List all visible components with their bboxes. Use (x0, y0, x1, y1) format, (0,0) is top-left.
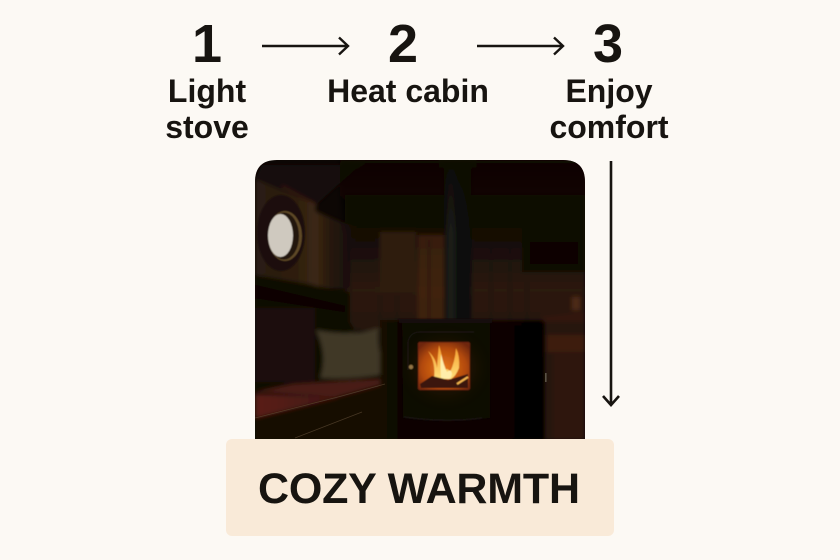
top shadow over wall (340, 160, 585, 235)
step 1 label: Light (168, 73, 246, 109)
wood wall (345, 195, 585, 330)
ceiling (255, 165, 360, 205)
porthole frame (257, 195, 305, 271)
bench seat front cushion (255, 394, 337, 418)
floor and stove surround (380, 320, 545, 440)
shelf ledge (255, 285, 345, 312)
step 3 number: 3 (593, 14, 623, 74)
curtain (314, 211, 351, 289)
flames (428, 345, 459, 379)
step 1 label: stove (165, 109, 249, 145)
cabinet door (582, 438, 583, 439)
right cabinet (545, 318, 585, 440)
pillow (316, 328, 386, 378)
stove handle (409, 365, 413, 369)
step 1 number: 1 (192, 14, 222, 74)
wall picture (520, 228, 585, 272)
wall planks (380, 240, 527, 320)
counter (540, 312, 585, 322)
step 3 label: comfort (549, 109, 669, 145)
stove glow (413, 340, 477, 396)
illustration: cabin interior with wood stove (255, 160, 585, 440)
bench back (255, 275, 385, 392)
warm wall glow left of pipe (418, 235, 444, 320)
porthole (257, 195, 305, 271)
step 3 (549, 14, 669, 145)
stove door outline (408, 332, 474, 370)
step 2 (327, 14, 489, 109)
fire window (418, 342, 470, 390)
stove top (399, 319, 492, 323)
step 2 number: 2 (388, 14, 418, 74)
arrow: step 1 to step 2 (262, 38, 348, 54)
bench front (255, 384, 385, 440)
banner background (226, 439, 614, 536)
porthole brass ring (268, 211, 302, 261)
left wall panel (255, 179, 316, 285)
mug on counter (572, 297, 580, 310)
step 3 label: Enjoy (565, 73, 653, 109)
stove pipe (444, 160, 471, 320)
bench seat back cushion (255, 379, 384, 397)
cabinet handle (545, 373, 547, 382)
banner text: COZY WARMTH (258, 465, 580, 513)
step 1 (165, 14, 249, 145)
wall cupboard (380, 232, 416, 292)
bench piping (255, 384, 385, 438)
step 2 label: Heat cabin (327, 73, 489, 109)
porthole glass (268, 214, 293, 257)
arrow: step 3 down to result (603, 161, 619, 405)
result banner (226, 439, 614, 536)
cabinet upper panel (547, 335, 585, 352)
arrow: step 2 to step 3 (477, 38, 563, 54)
stove body (402, 323, 490, 421)
stove (399, 319, 492, 421)
logs (420, 374, 468, 388)
